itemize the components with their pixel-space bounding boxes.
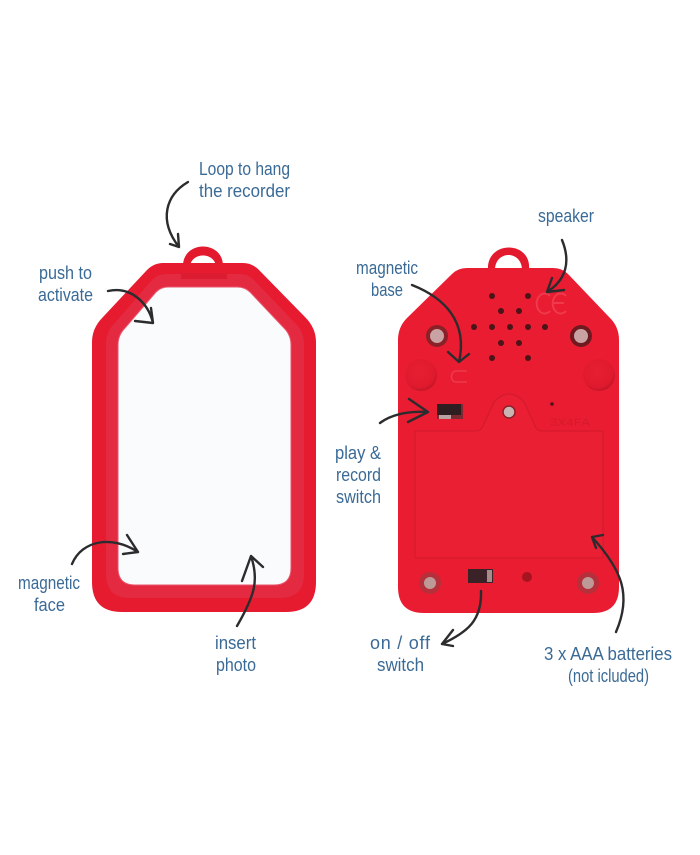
battery cover (415, 394, 603, 558)
red LED (522, 572, 532, 582)
arrow: play and record switch (380, 399, 428, 423)
label: speaker: speaker (538, 206, 594, 226)
speaker holes (471, 293, 548, 361)
on off slide switch (468, 569, 493, 583)
arrow: push to activate (108, 290, 153, 323)
label: play and record switch (335, 443, 381, 507)
label: push to activate: push to (39, 263, 92, 283)
label: loop to hang (199, 159, 290, 201)
label: magnetic face: magnetic (18, 573, 80, 593)
top push tab (181, 273, 227, 279)
label: push to activate (38, 263, 93, 305)
label: batteries: (not icluded) (568, 666, 649, 686)
label: batteries (544, 644, 672, 686)
label: play and record switch: play & (335, 443, 381, 463)
label: magnetic base: magnetic (356, 258, 418, 278)
indicator hole (550, 402, 554, 406)
arrow: magnetic base (412, 285, 469, 362)
arrow: on off switch (442, 591, 481, 646)
magnet bumps (405, 359, 615, 391)
label: play and record switch: switch (336, 487, 381, 507)
upper screws (426, 325, 592, 347)
outer frame (92, 263, 316, 612)
label: insert photo (215, 633, 256, 675)
label: on off switch: switch (377, 655, 424, 675)
device back: red housing with speaker, switches and battery cover (398, 248, 619, 613)
label: loop to hang: Loop to hang (199, 159, 290, 179)
back housing (398, 268, 619, 613)
label: batteries: 3 x AAA batteries (544, 644, 672, 664)
white photo panel (118, 287, 291, 585)
label: magnetic face: face (34, 595, 65, 615)
CE mark (537, 294, 566, 314)
arrow: magnetic face (72, 535, 138, 564)
label: on off switch: on / off (370, 633, 431, 653)
play and record slide switch (437, 404, 463, 419)
arrow: batteries (592, 535, 624, 632)
hanging loop, front (183, 246, 223, 266)
centre screw (503, 406, 515, 418)
arrow: insert photo (237, 556, 263, 626)
embossed marking: 3X4FA (550, 417, 591, 429)
label: magnetic face (18, 573, 80, 615)
arrow: speaker (547, 240, 566, 292)
label: loop to hang: the recorder (199, 181, 290, 201)
label: play and record switch: record (336, 465, 381, 485)
label: on off switch (370, 633, 431, 675)
label: insert photo: insert (215, 633, 256, 653)
inner bevel (106, 274, 304, 598)
label: magnetic base (356, 258, 418, 300)
hanging loop, back (488, 248, 529, 270)
label: magnetic base: base (371, 280, 403, 300)
device front: red frame with white photo panel (92, 246, 316, 612)
label: push to activate: activate (38, 285, 93, 305)
arrow: loop (167, 182, 188, 247)
lower screws (419, 572, 599, 594)
label: insert photo: photo (216, 655, 256, 675)
magnet symbol (451, 371, 467, 382)
